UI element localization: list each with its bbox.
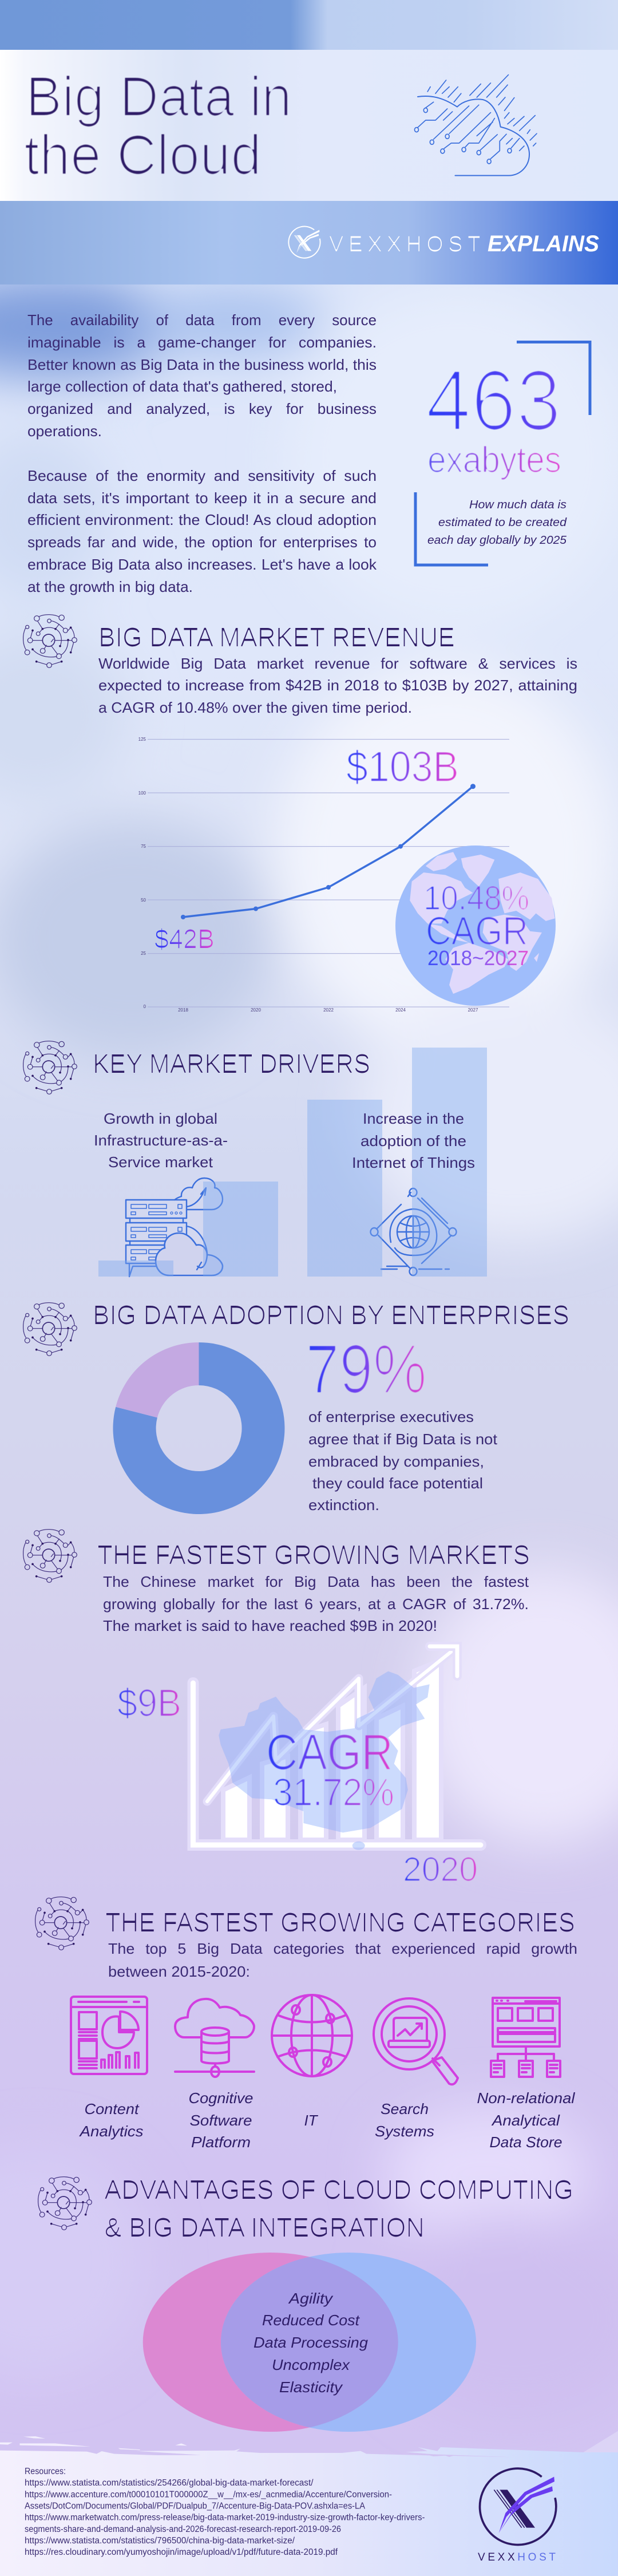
market revenue text: Worldwide Big Data market revenue for software & services is	[98, 655, 577, 672]
category labels: Cognitive	[189, 2089, 253, 2107]
icon: internet of things globe	[371, 1188, 457, 1275]
adoption text: of enterprise executives	[308, 1408, 474, 1425]
icon: section circuit	[23, 1041, 77, 1094]
icon: section circuit	[38, 2177, 92, 2230]
line chart: revenue: 2022	[323, 1008, 334, 1013]
heading: advantages: ADVANTAGES OF CLOUD COMPUTING	[104, 2175, 573, 2204]
adoption text: embraced by companies,	[308, 1453, 484, 1470]
icon: IT globe	[272, 1995, 352, 2076]
driver text: IaaS: Growth in global	[104, 1110, 217, 1127]
heading: fastest growing categories: THE FASTEST GROWING CATEGORIES	[105, 1907, 575, 1937]
line chart: revenue: 2024	[395, 1008, 406, 1013]
heading: advantages: & BIG DATA INTEGRATION	[104, 2212, 425, 2242]
heading: key market drivers: KEY MARKET DRIVERS	[93, 1049, 370, 1078]
brand: VEXXHOST EXPLAINS: VEXXHOST	[329, 232, 481, 256]
callout: 463 exabytes: How much data is	[469, 499, 566, 511]
icon: non-relational data store	[491, 1998, 560, 2077]
icon: section circuit	[23, 1530, 77, 1582]
resources text: https://res.cloudinary.com/yumyoshojin/image/upload/v1/pdf/future-data-2019.pdf	[25, 2547, 338, 2557]
category labels: Non-relational	[477, 2089, 576, 2107]
callout: 463 exabytes	[415, 342, 590, 565]
line chart: revenue: $103B	[346, 742, 459, 791]
map: China	[219, 1671, 430, 1850]
icon: search systems magnifier	[374, 1998, 458, 2084]
intro text: Because of the enormity and sensitivity of such	[27, 467, 377, 484]
markets text: The market is said to have reached $9B in 2020!	[103, 1617, 437, 1634]
icon: white logo	[288, 227, 320, 258]
label: $9B: $9B	[117, 1681, 181, 1725]
icon: cognitive software cloud database	[175, 1999, 254, 2077]
resources text	[25, 2467, 425, 2557]
stat: CAGR 31.72%: CAGR	[266, 1724, 393, 1780]
driver text: IaaS: Service market	[108, 1153, 213, 1171]
categories text: between 2015-2020:	[108, 1963, 250, 1980]
callout: 463 exabytes: 463	[426, 352, 561, 448]
category labels: IT	[304, 2112, 319, 2129]
heading: adoption: BIG DATA ADOPTION BY ENTERPRISES	[93, 1300, 569, 1330]
resources text: https://www.statista.com/statistics/254266/global-big-data-market-forecast/	[25, 2478, 314, 2488]
category labels: Search	[381, 2100, 429, 2117]
venn diagram: Elasticity	[279, 2379, 343, 2396]
driver text: IaaS: Infrastructure-as-a-	[94, 1132, 228, 1149]
markets text	[103, 1573, 529, 1634]
categories text: The top 5 Big Data categories that experienced rapid growth	[108, 1940, 577, 1957]
title: the Cloud	[24, 124, 262, 186]
intro text: organized and analyzed, is key for business	[27, 400, 377, 417]
resources text: Resources:	[25, 2467, 66, 2476]
callout: 463 exabytes: exabytes	[427, 439, 561, 480]
category labels: Systems	[375, 2123, 434, 2140]
icon: section circuit	[23, 615, 77, 667]
venn diagram	[143, 2253, 476, 2432]
intro text: Better known as Big Data in the business world, this	[27, 356, 377, 373]
footer panel	[0, 2431, 618, 2576]
intro text: The availability of data from every source	[27, 311, 377, 329]
title	[24, 65, 292, 186]
market revenue text: expected to increase from $42B in 2018 to $103B by 2027, attaining	[98, 677, 577, 694]
driver text: IoT	[352, 1110, 475, 1171]
line chart: revenue: 75	[141, 844, 146, 849]
heading: advantages	[104, 2175, 573, 2242]
heading: fastest growing markets: THE FASTEST GROWING MARKETS	[97, 1540, 530, 1570]
venn diagram: Reduced Cost	[262, 2312, 360, 2329]
categories text	[108, 1940, 577, 1980]
category labels	[78, 2089, 576, 2151]
intro text: spreads far and wide, the option for enterprises to	[27, 534, 377, 551]
icon: section circuit	[35, 1897, 89, 1950]
stat: CAGR 31.72%	[266, 1724, 394, 1814]
intro text: imaginable is a game-changer for companies.	[27, 334, 377, 351]
venn diagram: Uncomplex	[272, 2356, 350, 2373]
adoption text: extinction.	[308, 1496, 379, 1514]
line chart: revenue: 2018	[178, 1008, 188, 1013]
logo: VEXXHOST	[478, 2468, 556, 2563]
icon: content analytics dashboard	[71, 1997, 147, 2074]
title band	[0, 50, 618, 201]
intro text: efficient environment: the Cloud! As cloud adoption	[27, 511, 377, 528]
adoption text: they could face potential	[312, 1475, 483, 1492]
line chart: revenue: $42B	[154, 924, 215, 954]
category labels: Data Store	[490, 2134, 562, 2151]
line chart: revenue: 50	[141, 898, 146, 903]
markets text: The Chinese market for Big Data has been the fastest	[103, 1573, 529, 1590]
resources text: https://www.marketwatch.com/press-release/big-data-market-2019-industry-size-growth-factor-key-drivers-	[25, 2513, 425, 2523]
driver text: IoT: Internet of Things	[352, 1154, 475, 1171]
brand: VEXXHOST EXPLAINS: EXPLAINS	[488, 231, 599, 256]
line chart: revenue: 25	[141, 951, 146, 956]
globe: CAGR: CAGR	[426, 908, 528, 953]
resources text: https://www.accenture.com/t00010101T000000Z__w__/mx-es/_acnmedia/Accenture/Conversion-	[25, 2490, 392, 2499]
title: Big Data in	[26, 65, 292, 128]
chart: neon growth bars and arrow	[193, 1646, 481, 1845]
intro text	[27, 311, 377, 595]
brand: VEXXHOST EXPLAINS	[288, 227, 599, 258]
line chart: revenue: 2020	[251, 1008, 261, 1013]
icon: section circuit	[23, 1303, 77, 1356]
resources text: segments-share-and-demand-analysis-and-2026-forecast-research-report-2019-09-26	[25, 2524, 341, 2534]
donut chart: 79%	[113, 1342, 284, 1514]
category labels: Analytics	[78, 2123, 143, 2140]
blue brand band	[0, 201, 618, 285]
driver text: IoT: adoption of the	[360, 1132, 466, 1149]
intro text: large collection of data that's gathered, stored,	[27, 378, 337, 395]
venn diagram: Agility	[288, 2290, 334, 2307]
label: 2020: 2020	[403, 1850, 478, 1888]
callout: 463 exabytes: estimated to be created	[438, 516, 567, 529]
market revenue text: a CAGR of 10.48% over the given time period.	[98, 699, 412, 716]
globe: CAGR	[395, 846, 556, 1006]
intro text: at the growth in big data.	[27, 578, 193, 595]
venn diagram: Data Processing	[253, 2334, 369, 2351]
icon: servers and clouds	[126, 1178, 223, 1277]
line chart: revenue: 100	[138, 791, 146, 796]
resources text: Assets/DotCom/Documents/Global/PDF/Dualpub_7/Accenture-Big-Data-POV.ashxla=es-LA	[25, 2502, 366, 2511]
intro text: operations.	[27, 422, 102, 440]
logo: VEXXHOST: VEXXHOST	[478, 2551, 556, 2563]
driver text: IoT: Increase in the	[363, 1110, 464, 1127]
globe: CAGR: 10.48%	[423, 879, 529, 917]
callout: 463 exabytes: each day globally by 2025	[427, 534, 567, 547]
globe: CAGR: 2018~2027	[427, 946, 529, 970]
stat: 79%: 79%	[306, 1331, 427, 1408]
top sky band	[0, 0, 618, 50]
resources text: https://www.statista.com/statistics/796500/china-big-data-market-size/	[25, 2536, 295, 2546]
bars: drivers	[98, 1048, 487, 1277]
stat: CAGR 31.72%: 31.72%	[273, 1771, 394, 1814]
adoption text	[308, 1408, 498, 1514]
intro text: data sets, it's important to keep it in a secure and	[27, 489, 377, 507]
driver text: IaaS	[94, 1110, 228, 1171]
intro text: embrace Big Data also increases. Let's have a look	[27, 556, 377, 573]
category labels: Content	[85, 2100, 140, 2117]
line chart: revenue: 125	[138, 737, 146, 742]
market revenue text	[98, 655, 577, 716]
line chart: revenue	[138, 737, 509, 1013]
line chart: revenue: 0	[144, 1004, 146, 1009]
category labels: Platform	[191, 2134, 251, 2151]
category labels: Analytical	[491, 2112, 560, 2129]
category labels: Software	[190, 2112, 252, 2129]
adoption text: agree that if Big Data is not	[308, 1431, 498, 1448]
icon: circuit cloud	[415, 75, 537, 176]
heading: market revenue: BIG DATA MARKET REVENUE	[98, 622, 455, 652]
markets text: growing globally for the last 6 years, at a CAGR of 31.72%.	[103, 1595, 529, 1613]
line chart: revenue: 2027	[468, 1008, 478, 1013]
